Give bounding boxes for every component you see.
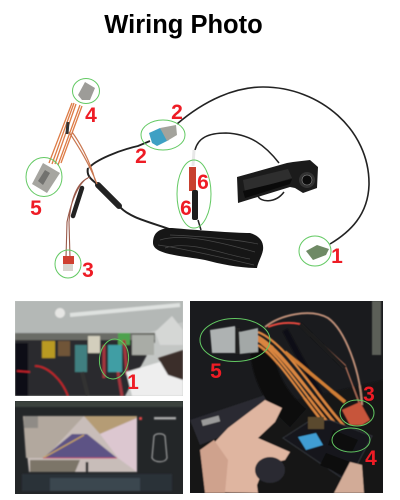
wire: camera cable bbox=[195, 133, 284, 201]
connector 5 bbox=[32, 163, 60, 193]
fuse holder sleeve bbox=[98, 185, 119, 206]
circle: 1 in photo bbox=[98, 338, 130, 380]
label 1 in photo: 1 bbox=[127, 371, 139, 394]
connector 2 bbox=[149, 125, 177, 146]
label 1: 1 bbox=[331, 245, 343, 268]
label 6 lower: 6 bbox=[180, 197, 192, 220]
label 3 in photo: 3 bbox=[363, 383, 375, 406]
circle: 5 in photo bbox=[200, 318, 270, 362]
wire: black cable from harness to coil bbox=[88, 168, 172, 230]
coiled cable bbox=[153, 228, 263, 268]
label 3: 3 bbox=[82, 259, 94, 282]
orange connector 3 bbox=[342, 402, 370, 425]
label 4 in photo: 4 bbox=[365, 447, 377, 470]
black fabric sleeve bbox=[262, 345, 298, 418]
hand bbox=[205, 400, 290, 493]
connector 6 bbox=[189, 150, 201, 230]
label 2 lower: 2 bbox=[135, 145, 147, 168]
label 4: 4 bbox=[85, 104, 97, 127]
photo: rear view on screen bbox=[15, 401, 183, 494]
wire: long black cable to connector 1 bbox=[177, 87, 369, 244]
circle: 4 bbox=[72, 78, 100, 104]
circle: 3 bbox=[55, 250, 81, 278]
photo: harness in hand bbox=[190, 301, 383, 493]
wires: orange harness bbox=[49, 103, 82, 165]
circle: 3 in photo bbox=[340, 400, 374, 426]
wiring diagram bbox=[26, 78, 369, 282]
wires: orange branch bbox=[69, 132, 97, 184]
wires and fuse sleeve to connector 3 bbox=[66, 177, 90, 258]
circle: 1 bbox=[299, 236, 331, 266]
circle: 6 bbox=[177, 160, 211, 228]
orange wires bbox=[257, 330, 346, 426]
title: Wiring Photo bbox=[104, 11, 263, 39]
circle: 5 bbox=[26, 158, 62, 196]
tan and red loop wires bbox=[265, 313, 362, 405]
label 6 upper: 6 bbox=[197, 171, 209, 194]
connector 1 bbox=[306, 245, 329, 260]
connector 4 bbox=[78, 82, 95, 100]
reversing camera handle bbox=[237, 160, 318, 203]
white connector 5 bbox=[210, 326, 238, 353]
label 2 upper: 2 bbox=[171, 101, 183, 124]
wire: black cable from harness to connector 2 bbox=[89, 141, 150, 168]
black socket unit bbox=[283, 420, 372, 482]
sleeve on orange harness bbox=[67, 122, 68, 134]
label 5: 5 bbox=[30, 197, 42, 220]
connector 3 bbox=[63, 256, 74, 271]
label 5 in photo: 5 bbox=[210, 360, 222, 383]
circle: 4 in photo bbox=[332, 428, 370, 452]
photo: radio connectors bbox=[15, 301, 183, 396]
circle: 2 bbox=[141, 120, 185, 150]
